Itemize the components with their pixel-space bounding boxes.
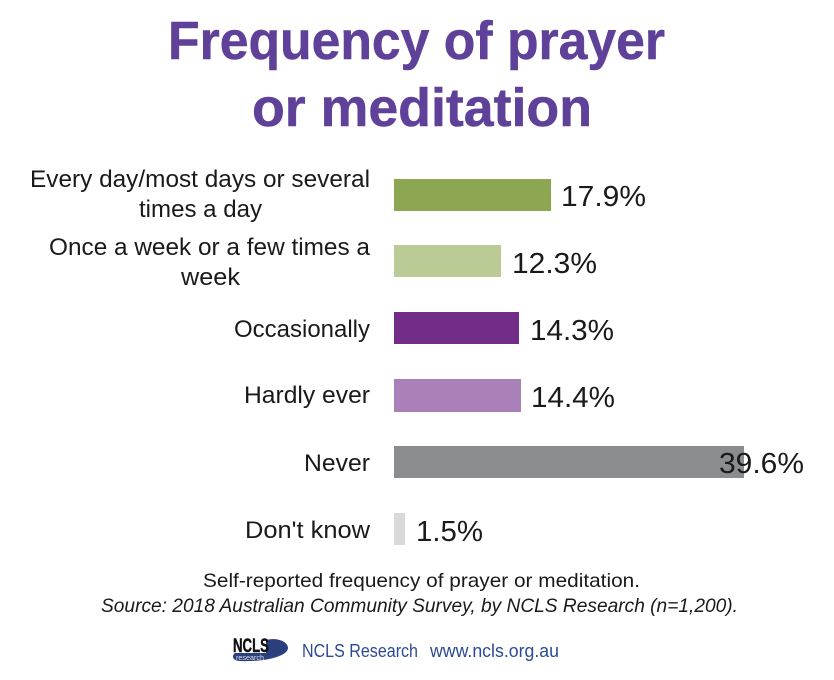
category labels bbox=[30, 166, 371, 544]
caption bbox=[101, 570, 738, 617]
title: Frequency of prayer bbox=[168, 11, 665, 71]
caption: Source: 2018 Australian Community Survey, by NCLS Research (n=1,200). bbox=[101, 595, 738, 617]
value labels: 39.6% bbox=[719, 448, 804, 480]
category labels: Occasionally bbox=[234, 316, 371, 343]
value labels: 17.9% bbox=[561, 181, 646, 213]
value labels: 12.3% bbox=[512, 248, 597, 280]
category labels: Hardly ever bbox=[244, 382, 370, 409]
value labels: 1.5% bbox=[416, 516, 483, 548]
category labels: times a day bbox=[139, 196, 263, 223]
value labels bbox=[416, 181, 804, 548]
footer text bbox=[302, 641, 559, 661]
category labels: Once a week or a few times a bbox=[49, 234, 370, 261]
value labels: 14.4% bbox=[531, 382, 615, 414]
footer text: NCLS Research bbox=[302, 641, 418, 661]
title bbox=[168, 11, 665, 138]
footer logo: research bbox=[236, 653, 264, 662]
value labels: 14.3% bbox=[530, 315, 614, 347]
caption: Self-reported frequency of prayer or meditation. bbox=[203, 570, 640, 592]
footer logo: NCLS bbox=[233, 636, 269, 657]
bars bbox=[394, 179, 744, 545]
category labels: week bbox=[180, 264, 241, 291]
footer text: www.ncls.org.au bbox=[429, 641, 559, 661]
category labels: Every day/most days or several bbox=[30, 166, 370, 193]
title: or meditation bbox=[252, 78, 592, 138]
bar chart bbox=[30, 166, 804, 548]
category labels: Don't know bbox=[245, 517, 370, 544]
category labels: Never bbox=[304, 450, 370, 477]
